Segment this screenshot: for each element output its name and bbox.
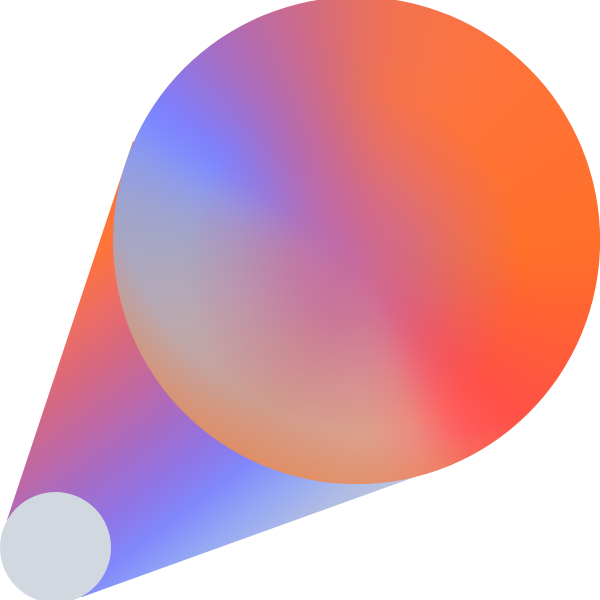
large gradient circle [113, 0, 600, 484]
cone: gradient tapered body [7, 141, 416, 597]
small grey circle [0, 492, 111, 600]
